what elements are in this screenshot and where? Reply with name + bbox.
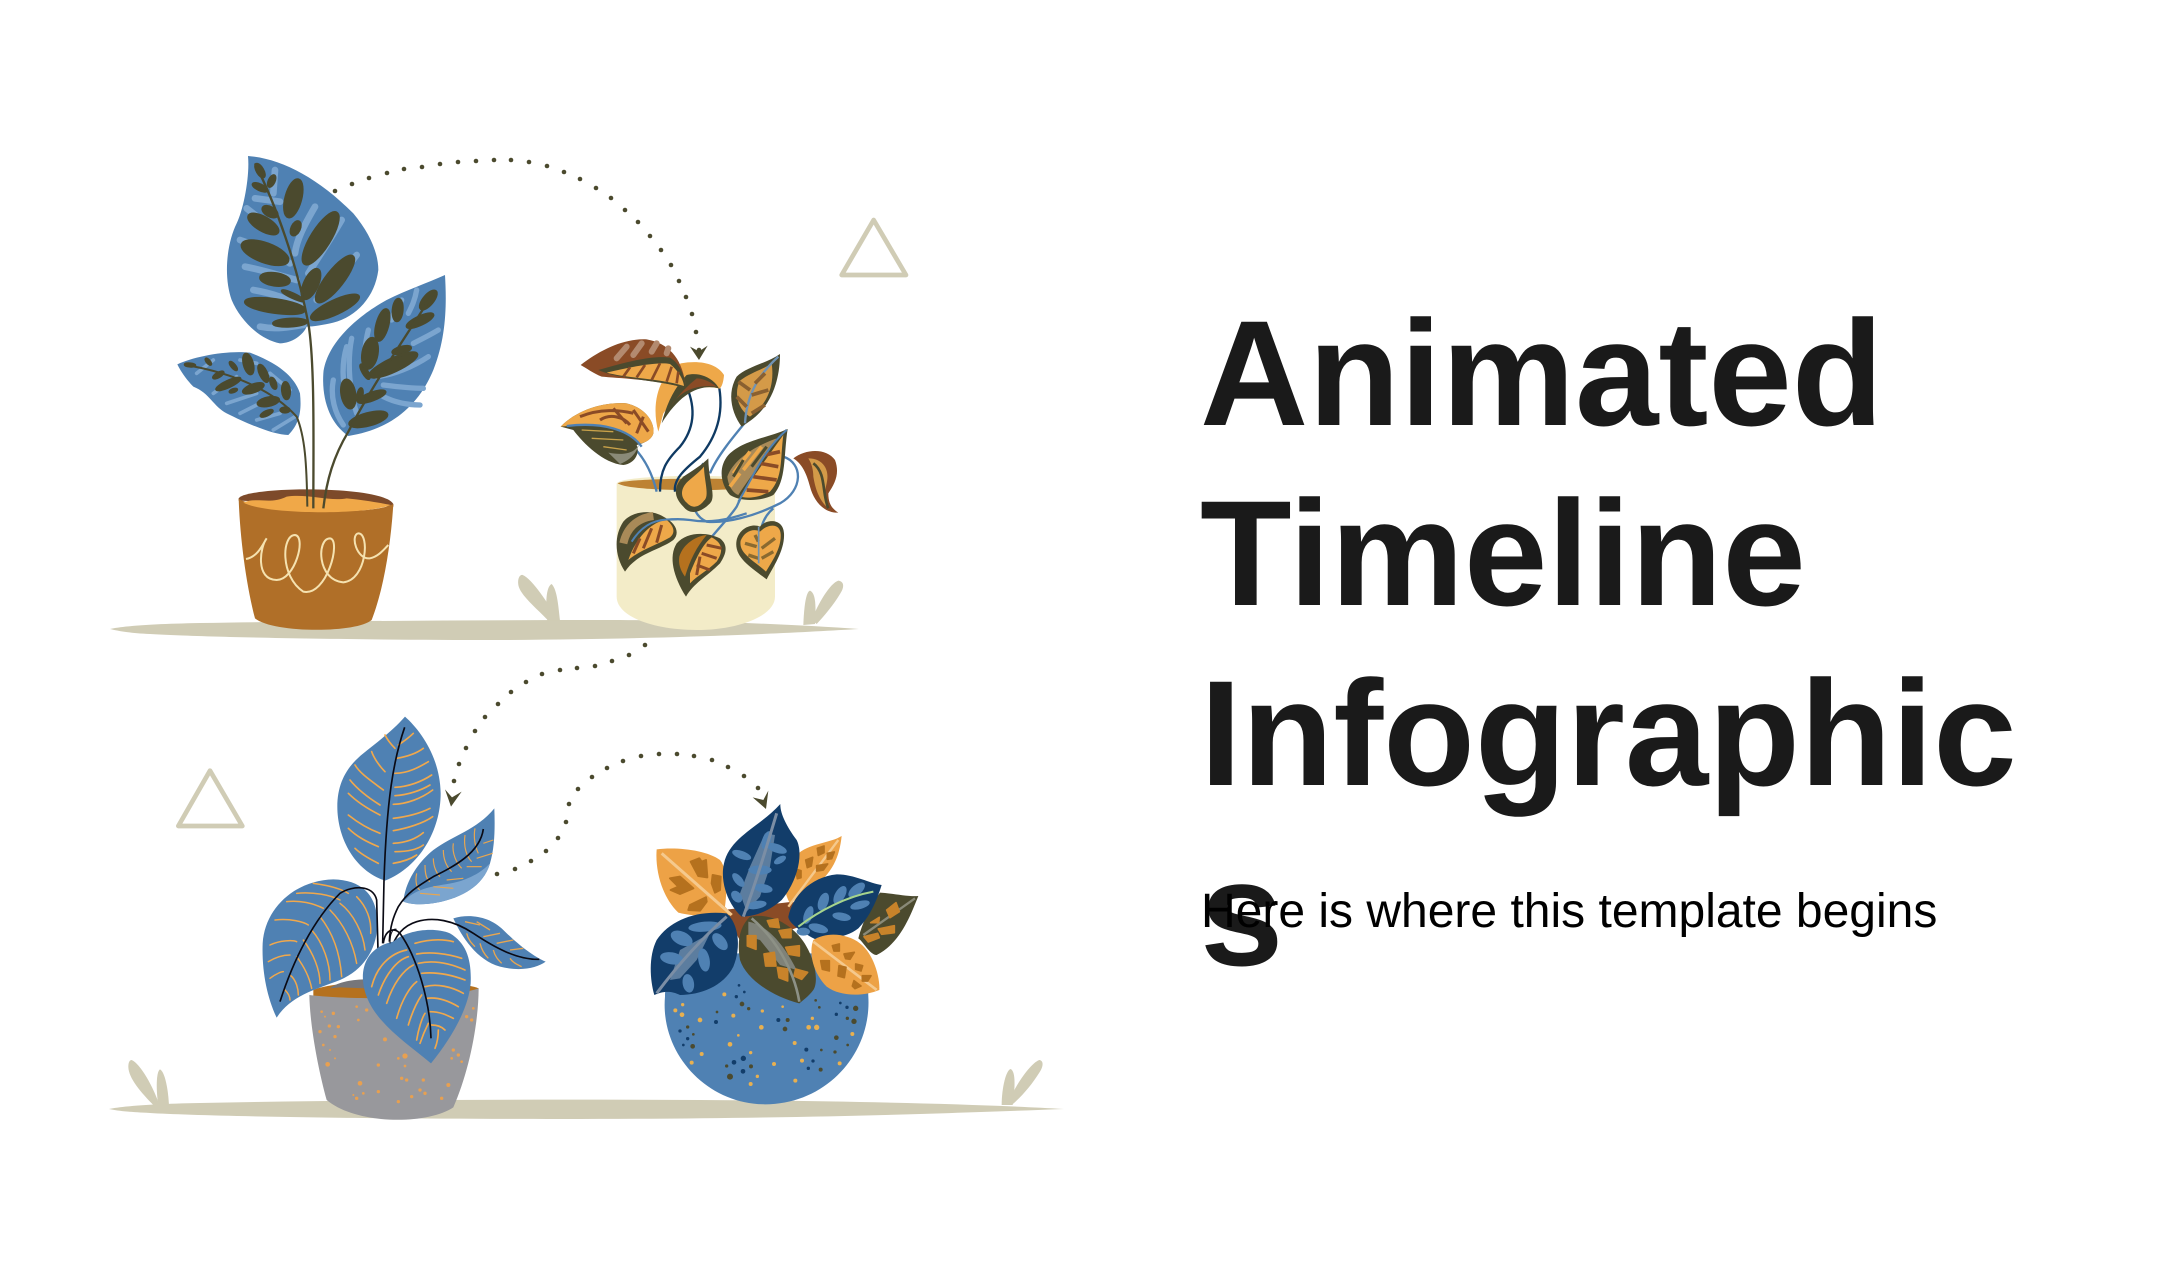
plant 3: blue striped plant in grey pot <box>128 717 546 1120</box>
leaf: lower middle <box>673 534 726 597</box>
leaf: large top <box>227 156 378 508</box>
leaf: orange left <box>656 848 733 916</box>
vines <box>570 387 798 577</box>
leaf: navy right <box>788 874 882 940</box>
title: Infographic <box>1200 649 2017 817</box>
title: Timeline <box>1200 469 1806 637</box>
leaf: center front <box>363 929 471 1063</box>
pot 1 <box>239 489 393 630</box>
leaf: navy left <box>651 913 738 995</box>
shelf: upper ground <box>110 620 859 640</box>
grass tuft lower left <box>128 1060 169 1106</box>
title: Animated <box>1200 289 1883 457</box>
arrow head lower <box>753 791 768 809</box>
leaf: olive centre <box>739 916 816 1003</box>
leaf: navy top <box>723 804 800 917</box>
leaf: olive right <box>858 893 918 955</box>
leaf centre: brown base <box>723 902 800 947</box>
dotted arrow: plant 1 to plant 2 <box>333 158 701 352</box>
pot 4 <box>665 953 869 1104</box>
leaf: lower right <box>393 916 546 969</box>
arrow head upper <box>690 346 708 360</box>
plant 1: blue fern-leaf plant in brown pot <box>177 156 446 630</box>
title: s <box>1200 829 1283 997</box>
leaf: left small <box>177 352 307 507</box>
leaf: middle right large <box>722 429 788 502</box>
triangle upper <box>842 220 906 275</box>
leaf: center small orange <box>676 458 713 512</box>
leaf: orange top right <box>785 836 842 907</box>
triangle lower <box>178 771 242 826</box>
leaf: upper right <box>731 354 780 427</box>
pot 3 <box>309 979 479 1120</box>
shelf: lower ground <box>109 1100 1064 1119</box>
leaf: lower left <box>617 512 677 572</box>
subtitle: Here is where this template begins <box>1201 885 1937 938</box>
leaf: right <box>323 275 446 508</box>
leaf: left <box>263 879 378 1018</box>
leaf: lower right heart <box>736 521 784 579</box>
grass tufts upper shelf <box>518 575 843 625</box>
leaf: upper right <box>389 808 495 942</box>
grass tuft lower right <box>1002 1060 1043 1105</box>
dotted arrow: plant 2 to plant 3 <box>452 643 647 783</box>
arrow head middle <box>445 789 462 807</box>
pot 2 <box>617 476 775 630</box>
plant 2: variegated pothos in cream pot <box>518 220 906 630</box>
plant 4: coloured leaves in round blue pot <box>651 791 1043 1105</box>
title <box>1200 289 2017 997</box>
leaf: left <box>561 403 654 465</box>
leaf: top brown <box>581 339 724 432</box>
leaf: top <box>337 717 441 943</box>
dotted arrow: plant 3 to plant 4 <box>495 752 760 876</box>
leaf: orange lower right <box>811 935 879 995</box>
leaf: far right <box>793 451 838 513</box>
